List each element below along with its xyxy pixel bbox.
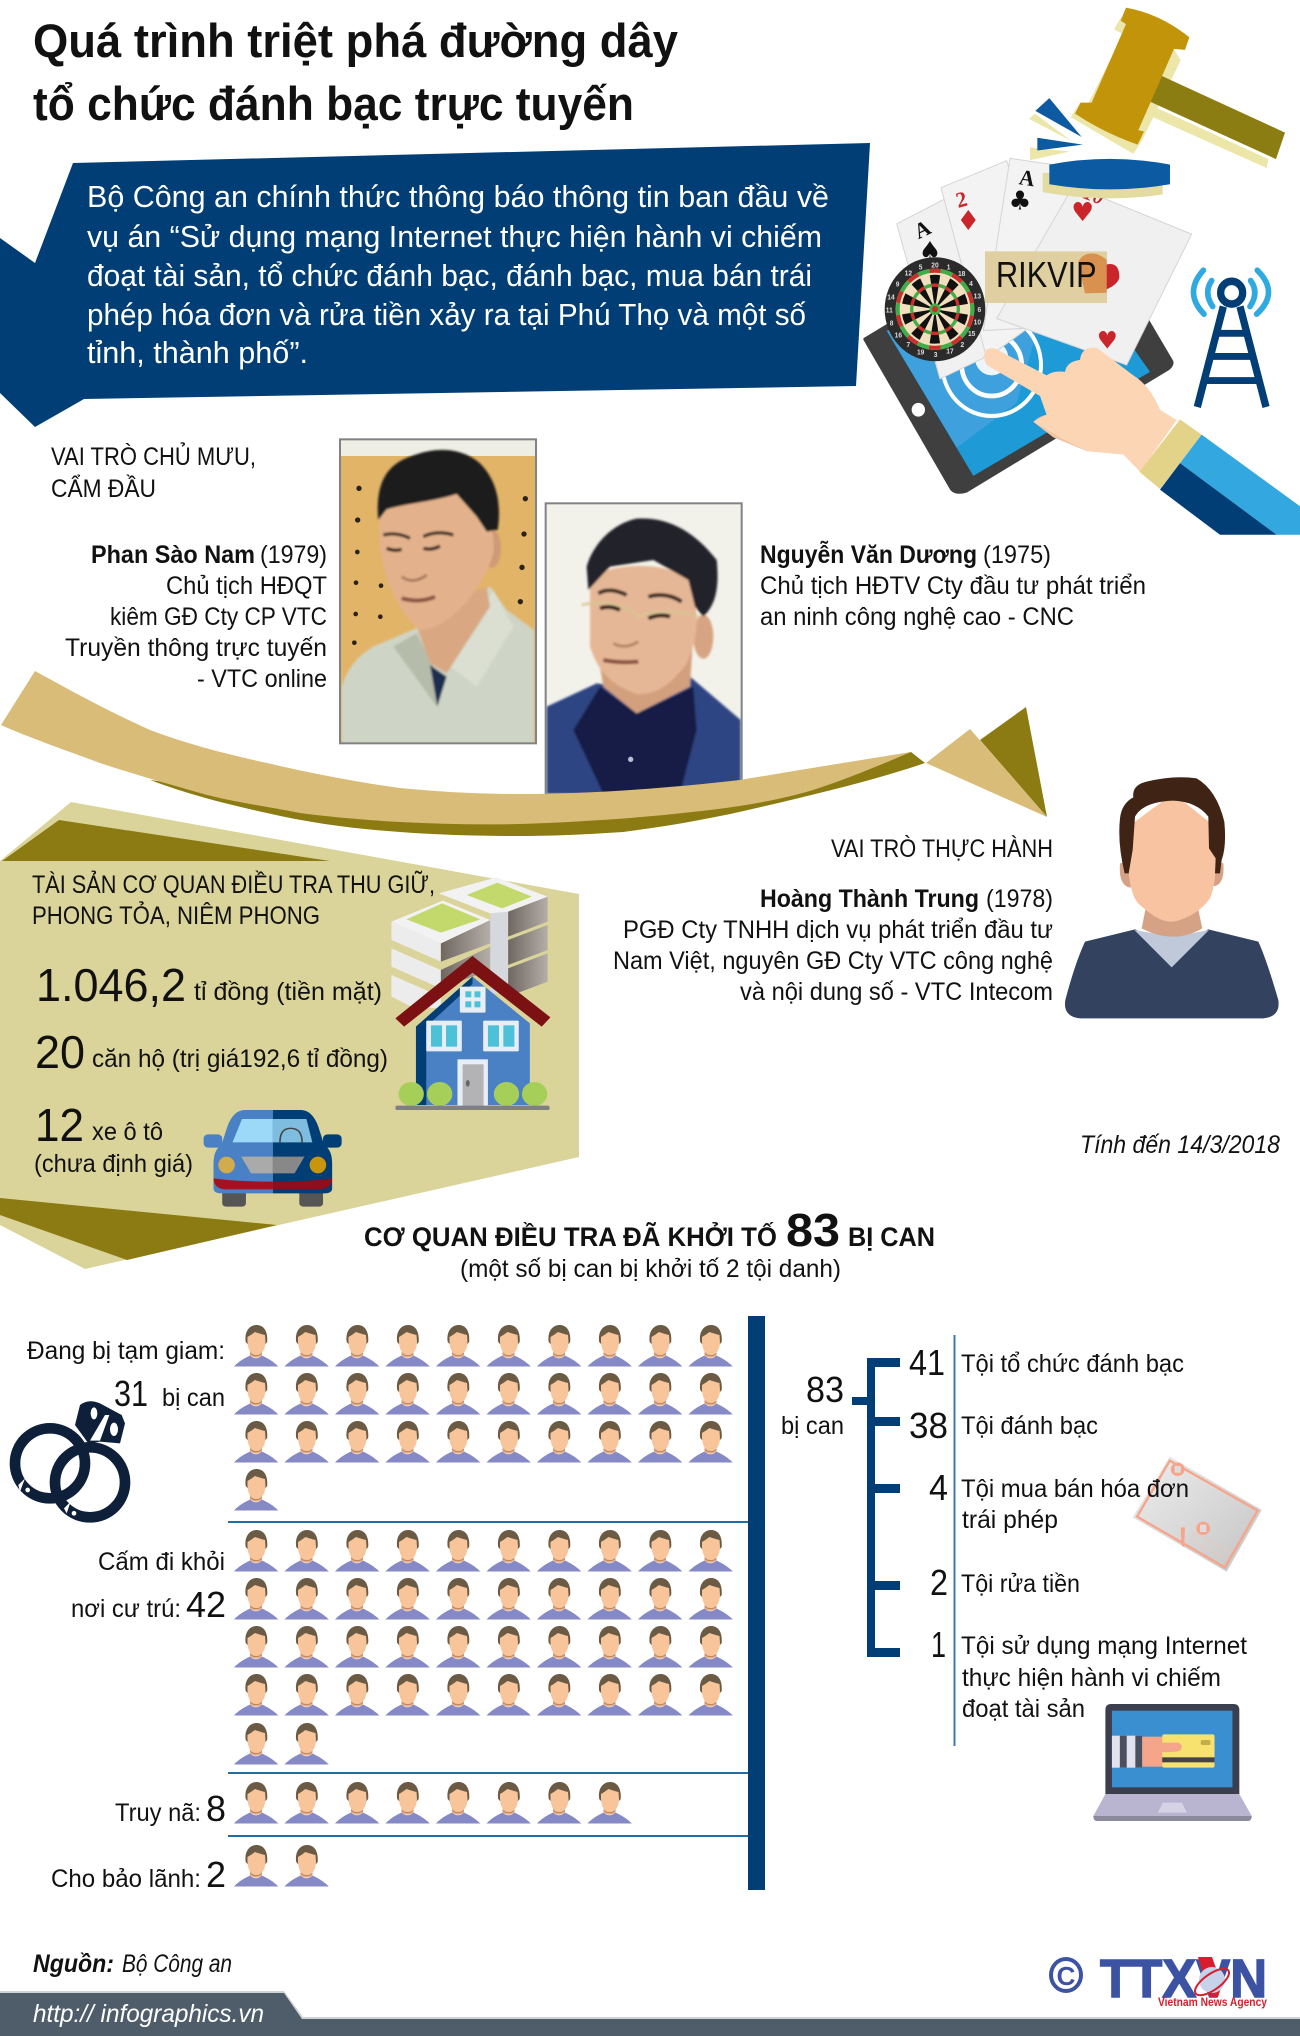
charge: organising gambling: 41 (909, 1342, 945, 1383)
profile: Nguyễn Văn Dương (760, 539, 1146, 631)
group: wanted 8: 8 (206, 1788, 226, 1829)
charge: internet fraud: đoạt tài sản (962, 1695, 1085, 1723)
section heading: 83 defendants: 83 (786, 1204, 840, 1256)
person icons row 2 (234, 1578, 733, 1620)
icon: car (204, 1110, 342, 1207)
charge: money laundering (930, 1562, 1080, 1603)
charge: illegal invoices (929, 1467, 1189, 1534)
profile: Hoàng Thành Trung: và nội dung số - VTC Intecom (740, 978, 1053, 1006)
icon: dartboard: 11 (886, 307, 893, 314)
icon: dartboard: 16 (895, 332, 902, 339)
profile: Phan Sào Nam: Phan Sào Nam (91, 541, 255, 569)
heading: mastermind role: CẨM ĐẦU (51, 474, 156, 503)
stat: apartments: 20 (35, 1026, 85, 1078)
photo: Nguyễn Văn Dương (546, 503, 742, 794)
icon: dartboard: 14 (887, 295, 895, 302)
profile: Nguyễn Văn Dương: Nguyễn Văn Dương (760, 539, 977, 569)
panel heading (32, 869, 435, 930)
section heading: 83 defendants: (một số bị can bị khởi tố 2 tội danh) (460, 1255, 841, 1283)
logo: TTXVN: TTXVN (1100, 1949, 1267, 2009)
total: 83 defendants: 83 (806, 1369, 844, 1410)
total: 83 defendants: bị can (781, 1412, 844, 1440)
icon: dartboard: 8 (890, 321, 894, 328)
stat: apartments: căn hộ (trị giá192,6 tỉ đồng) (92, 1045, 388, 1073)
group: in detention 31: Đang bị tạm giam: (27, 1337, 225, 1365)
intro banner: đoạt tài sản, tổ chức đánh bạc, đánh bạc, mua bán trái (87, 258, 812, 293)
person icons row 5 (234, 1723, 329, 1764)
icon: playing cards: 2 (953, 187, 970, 213)
icon: dartboard: 1 (947, 264, 951, 271)
icon: invoice (1133, 1457, 1262, 1572)
total: 83 defendants (781, 1369, 844, 1440)
charge: gambling: 38 (909, 1405, 948, 1446)
icon: dartboard: 20 (931, 262, 939, 270)
intro banner: Bộ Công an chính thức thông báo thông tin ban đầu về (87, 179, 829, 214)
icon: playing cards: ♠ (919, 237, 941, 267)
person icons row 2 (234, 1373, 733, 1414)
icon: dartboard: 5 (919, 264, 923, 271)
icon: dartboard (885, 257, 985, 361)
section heading: 83 defendants (364, 1204, 935, 1283)
charge: gambling: Tội đánh bạc (961, 1412, 1098, 1440)
icon: playing cards: 10 (1081, 182, 1107, 210)
icon: playing cards: ♣ (1009, 186, 1031, 216)
group: bail 2 (51, 1845, 329, 1895)
icon: tablet (865, 208, 1172, 492)
profile: Phan Sào Nam (65, 541, 327, 693)
group: bail 2: Cho bảo lãnh: (51, 1865, 201, 1893)
profile: Phan Sào Nam: Truyền thông trực tuyến (65, 634, 327, 662)
label: RIKVIP (985, 251, 1119, 303)
icon: dartboard: 2 (960, 342, 964, 349)
icon: hand (984, 348, 1300, 535)
panel heading: TÀI SẢN CƠ QUAN ĐIỀU TRA THU GIỮ, (32, 869, 435, 899)
group: in detention 31: bị can (162, 1384, 225, 1412)
icon: gavel (1029, 8, 1285, 168)
footer bar: http:// infographics.vn (33, 2000, 264, 2028)
profile: Hoàng Thành Trung: (1978) (986, 885, 1053, 913)
profile: Hoàng Thành Trung: Hoàng Thành Trung (760, 885, 979, 913)
group: travel ban 42 (71, 1530, 733, 1764)
icon: dartboard: 4 (969, 281, 973, 288)
icon: dartboard: 3 (934, 352, 938, 359)
profile: Phan Sào Nam: (1979) (260, 541, 327, 569)
charge: illegal invoices: 4 (929, 1467, 948, 1508)
person icons row (234, 1782, 632, 1824)
title: tổ chức đánh bạc trực tuyến (33, 77, 634, 130)
charge: gambling (909, 1405, 1098, 1446)
profile: Hoàng Thành Trung: Nam Việt, nguyên GĐ Cty VTC công nghệ (613, 947, 1053, 975)
stat: cars: xe ô tô (92, 1118, 163, 1146)
stat: cash: 1.046,2 (36, 959, 186, 1011)
logo: TTXVN: Vietnam News Agency (1158, 1995, 1267, 2009)
profile: Nguyễn Văn Dương: Chủ tịch HĐTV Cty đầu tư phát triển (760, 572, 1146, 600)
illustration: gavel, cards, tablet, hand (865, 8, 1300, 535)
stat: cars (34, 1099, 193, 1178)
icon: playing cards: ♥ (1071, 198, 1094, 228)
profile: Phan Sào Nam: kiêm GĐ Cty CP VTC (110, 603, 327, 631)
section heading: 83 defendants: CƠ QUAN ĐIỀU TRA ĐÃ KHỞI TỐ (364, 1220, 777, 1252)
heading: mastermind role: VAI TRÒ CHỦ MƯU, (51, 441, 256, 471)
charge: internet fraud: Tội sử dụng mạng Internet (961, 1632, 1247, 1660)
profile: Phan Sào Nam: Chủ tịch HĐQT (166, 572, 327, 600)
heading: mastermind role (51, 441, 256, 503)
source: Bộ Công an (122, 1950, 232, 1978)
group: in detention 31 (15, 1325, 733, 1517)
charge: internet fraud: thực hiện hành vi chiếm (962, 1664, 1221, 1692)
title: Quá trình triệt phá đường dây (33, 14, 678, 67)
icon: dartboard: 6 (977, 307, 981, 314)
group: wanted 8: Truy nã: (115, 1799, 201, 1827)
photo: Phan Sào Nam (340, 439, 536, 743)
profile: Hoàng Thành Trung: VAI TRÒ THỰC HÀNH (831, 834, 1053, 863)
section heading: 83 defendants: BỊ CAN (848, 1222, 935, 1252)
icon: playing cards: ♥ (1097, 326, 1118, 355)
intro banner: vụ án “Sử dụng mạng Internet thực hiện hành vi chiếm (87, 219, 822, 254)
icon: dartboard: 19 (917, 349, 925, 356)
stat: cars: (chưa định giá) (34, 1150, 193, 1178)
avatar: Hoàng Thành Trung (1065, 777, 1279, 1018)
icon: signal tower (1193, 270, 1268, 407)
person icons row 1 (234, 1530, 733, 1572)
panel: seized assets (0, 802, 579, 1269)
icon: dartboard: 15 (968, 331, 976, 338)
icon: playing cards (897, 158, 1192, 379)
charge: organising gambling (909, 1342, 1184, 1383)
icon: playing cards: A (910, 215, 935, 244)
bracket: charges breakdown (852, 1358, 900, 1657)
icon: playing cards: A (1018, 165, 1037, 191)
icon: laptop with credit card (1093, 1704, 1252, 1821)
icon: dartboard: 13 (974, 293, 981, 301)
icon: dartboard: 17 (946, 349, 954, 356)
icon: money stacks and house (391, 877, 550, 1110)
charge: illegal invoices: Tội mua bán hóa đơn (961, 1475, 1189, 1503)
footer bar (0, 1991, 1300, 2036)
profile: Hoàng Thành Trung: PGĐ Cty TNHH dịch vụ phát triển đầu tư (623, 916, 1053, 944)
group: in detention 31: 31 (114, 1373, 148, 1414)
icon: dartboard: 12 (905, 270, 912, 278)
charge: money laundering: Tội rửa tiền (961, 1570, 1080, 1598)
profile: Phan Sào Nam: - VTC online (197, 665, 327, 693)
group: wanted 8 (115, 1782, 632, 1829)
icon: handcuffs (15, 1401, 125, 1517)
charge: illegal invoices: trái phép (962, 1506, 1058, 1534)
icon: dartboard: 10 (974, 320, 981, 327)
intro banner: phép hóa đơn và rửa tiền xảy ra tại Phú Thọ và một số (87, 297, 806, 332)
group: travel ban 42: Cấm đi khỏi (98, 1548, 225, 1576)
profile: Nguyễn Văn Dương: (1975) (983, 541, 1051, 569)
panel heading: PHONG TỎA, NIÊM PHONG (32, 900, 320, 930)
person icons row 4 (234, 1674, 733, 1716)
person icons row (234, 1845, 329, 1886)
thick vertical divider (748, 1316, 765, 1890)
person icons row 3 (234, 1421, 733, 1462)
group: travel ban 42: 42 (186, 1584, 226, 1625)
group: travel ban 42: nơi cư trú: (71, 1595, 181, 1623)
stat: cash: tỉ đồng (tiền mặt) (194, 978, 382, 1006)
label: RIKVIP: RIKVIP (996, 255, 1097, 295)
stat: cars: 12 (35, 1099, 84, 1151)
person icons row 1 (234, 1325, 733, 1366)
intro banner: tỉnh, thành phố”. (87, 335, 308, 370)
icon: dartboard: 18 (958, 271, 966, 278)
swoosh arrow (1, 671, 1047, 836)
source (33, 1950, 232, 1978)
charge: organising gambling: Tội tổ chức đánh bạc (961, 1350, 1184, 1378)
source: Nguồn: (33, 1950, 114, 1978)
profile: Hoàng Thành Trung (613, 834, 1053, 1006)
stat: cash (36, 959, 382, 1011)
charge: money laundering: 2 (930, 1562, 948, 1603)
icon: dartboard: 7 (906, 342, 910, 349)
stat: apartments (35, 1026, 388, 1078)
logo: TTXVN: C (1057, 1961, 1076, 1991)
charge: internet fraud: 1 (931, 1624, 946, 1665)
icon: dartboard: 9 (896, 281, 900, 289)
date note: Tính đến 14/3/2018 (1080, 1131, 1280, 1159)
title (33, 14, 678, 130)
icon: playing cards: ♦ (956, 206, 980, 237)
person icons row 3 (234, 1626, 733, 1668)
group: bail 2: 2 (206, 1854, 226, 1895)
charge: internet fraud (931, 1624, 1247, 1723)
blue block of gavel (1043, 159, 1170, 198)
intro banner (0, 143, 870, 427)
person icons row 4 (234, 1469, 278, 1510)
profile: Nguyễn Văn Dương: an ninh công nghệ cao - CNC (760, 603, 1074, 631)
